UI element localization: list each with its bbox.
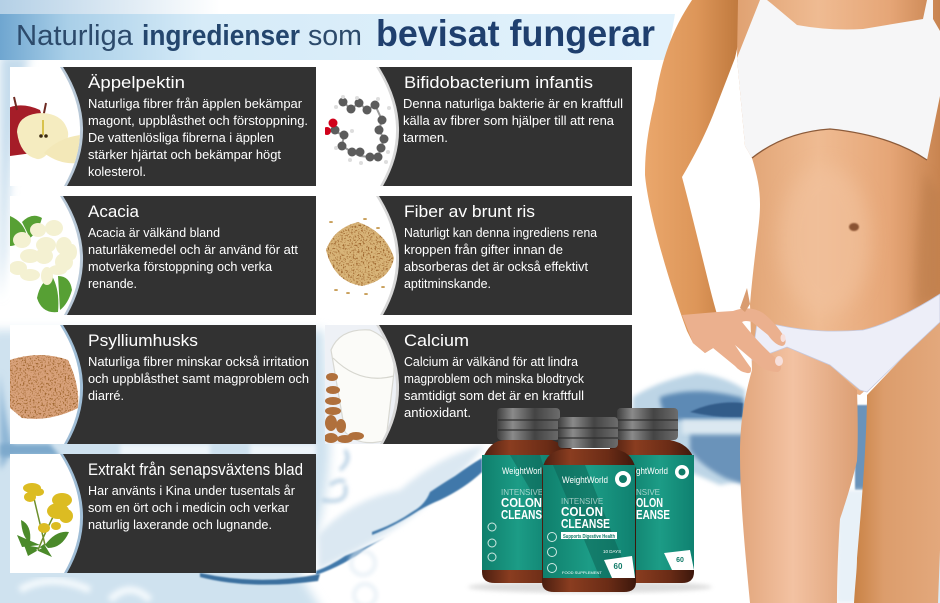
bottle: left: CLEANS <box>501 507 542 522</box>
heading: Extrakt från senapsväxtens blad <box>88 460 303 479</box>
water rings <box>322 450 348 501</box>
panel: Psylliumhusks <box>10 325 316 444</box>
image panel: acacia flowers <box>9 196 83 315</box>
description: Naturligt kan denna ingrediens rena <box>404 226 597 240</box>
description: Naturliga fibrer från äpplen bekämpar <box>88 97 302 111</box>
description: renande. <box>88 277 137 291</box>
hand on hip <box>682 288 786 373</box>
description: och uppblåsthet samt magproblem och <box>88 372 309 386</box>
abdomen shading <box>780 165 870 315</box>
description: De vattenlösliga fibrerna i äpplen <box>88 131 274 145</box>
bottle: right: OLON <box>636 495 663 510</box>
heading band <box>0 14 675 60</box>
title: ingredienser <box>142 20 300 52</box>
bottle: center: COLON <box>561 504 603 519</box>
navel <box>849 223 859 231</box>
description: aptitminskande. <box>404 277 491 291</box>
top left blue fade <box>0 0 220 16</box>
description: som en ört och i medicin och verkar <box>88 501 289 515</box>
left thigh <box>740 347 858 603</box>
description: motverka förstoppning och verka <box>88 260 272 274</box>
description: stärker hjärtat och bekämpar högt <box>88 148 282 162</box>
bottle: center: WeightWorld <box>562 475 608 485</box>
description: naturlig laxerande och lugnande. <box>88 518 272 532</box>
image panel: molecule <box>323 67 399 186</box>
title <box>16 13 655 54</box>
description: naturläkemedel och är använd för att <box>88 243 299 257</box>
panel: Calcium <box>324 325 632 444</box>
image panel: apple <box>8 67 83 186</box>
title: Naturliga <box>16 20 134 52</box>
heading: Psylliumhusks <box>88 331 198 350</box>
bottle: left <box>482 408 575 583</box>
description <box>88 484 295 532</box>
bottle: right: NSIVE <box>636 488 660 497</box>
pale wave wash <box>318 445 485 570</box>
heading: Äppelpektin <box>88 73 185 92</box>
left edge blue glow <box>0 55 30 300</box>
description: magont, uppblåsthet och förstoppning. <box>88 114 308 128</box>
description <box>403 97 623 145</box>
description: diarré. <box>88 389 124 403</box>
description: källa av fibrer som hjälper till att rena <box>403 114 614 128</box>
panel: Äppelpektin <box>8 67 316 186</box>
bottle: center: INTENSIVE <box>561 497 603 506</box>
description: Har använts i Kina under tusentals år <box>88 484 295 498</box>
description <box>88 97 308 179</box>
right water <box>632 373 745 485</box>
bottle: center: 10 DAYS <box>603 549 621 554</box>
bottle: center <box>542 417 636 592</box>
heading: Bifidobacterium infantis <box>404 73 593 92</box>
description: magproblem och minska blodtryck <box>404 372 585 386</box>
panel: Fiber av brunt ris <box>325 196 632 315</box>
description: absorberas det är också effektivt <box>404 260 589 274</box>
image panel: milk and almonds <box>324 325 399 444</box>
bottle: right: 60 <box>676 557 684 564</box>
crop top <box>737 0 940 160</box>
panel: Extrakt från senapsväxtens blad <box>10 454 316 573</box>
description <box>404 226 597 291</box>
bottle: left: INTENSIVE <box>501 488 543 497</box>
heading: Fiber av brunt ris <box>404 202 535 221</box>
description: antioxidant. <box>404 406 471 420</box>
title: som <box>308 20 362 52</box>
bottle: left: COLON <box>501 495 542 510</box>
bottle: center: FOOD SUPPLEMENT <box>562 570 602 575</box>
bottle: right <box>610 408 694 583</box>
description: Calcium är välkänd för att lindra <box>404 355 578 369</box>
torso and upper chest <box>737 0 940 395</box>
bottle: right: ghtWorld <box>636 466 668 476</box>
description: tarmen. <box>403 131 448 145</box>
briefs <box>752 294 940 392</box>
bottle: left: WeightWorld <box>502 466 546 476</box>
description <box>404 355 585 420</box>
panel: Bifidobacterium infantis <box>323 67 632 186</box>
product: three bottles <box>468 408 712 593</box>
left arm <box>645 0 748 353</box>
description: samtidigt som det är en kraftfull <box>404 389 584 403</box>
water splash background <box>0 330 940 603</box>
description: kroppen från gifter innan de <box>404 243 563 257</box>
description <box>88 355 309 403</box>
image panel: mustard plant <box>10 454 83 573</box>
bottle: center: 60 <box>614 562 623 571</box>
image panel: psyllium seeds <box>10 325 83 444</box>
bottle: center: Supports Digestive Health <box>563 534 615 540</box>
description: kolesterol. <box>88 165 146 179</box>
description: Naturliga fibrer minskar också irritation <box>88 355 309 369</box>
image panel: brown rice <box>325 196 399 315</box>
bottle: right: EANSE <box>636 507 670 522</box>
woman's torso photo <box>645 0 940 603</box>
heading: Calcium <box>404 331 469 350</box>
description: Acacia är välkänd bland <box>88 226 220 240</box>
heading: Acacia <box>88 202 140 221</box>
bottle: center: CLEANSE <box>561 516 610 531</box>
panel: Acacia <box>9 196 316 315</box>
description: Denna naturliga bakterie är en kraftfull <box>403 97 623 111</box>
description <box>88 226 299 291</box>
title: bevisat fungerar <box>376 13 655 54</box>
right thigh <box>854 322 940 603</box>
